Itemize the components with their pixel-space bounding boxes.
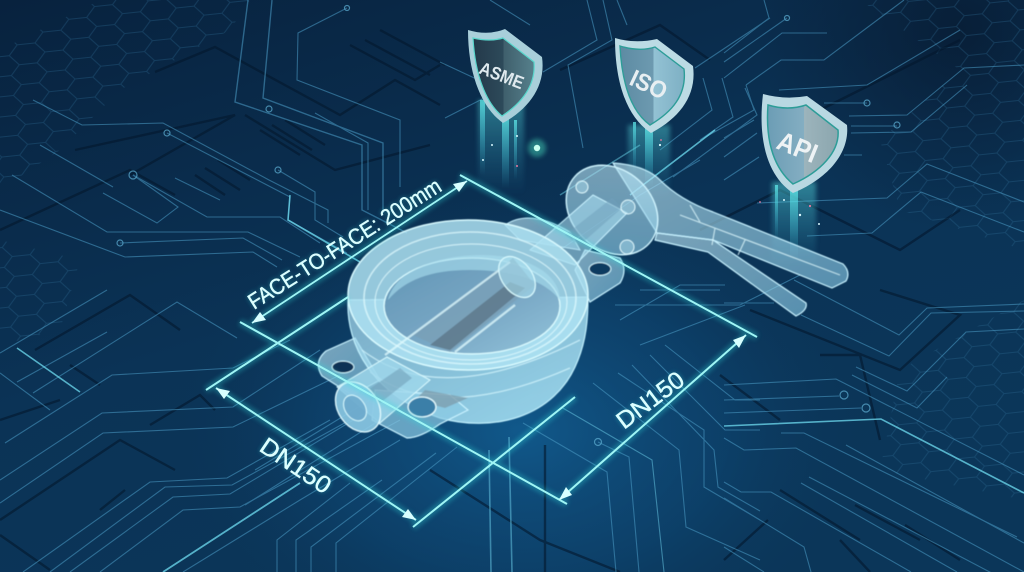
valve shaft <box>413 258 535 352</box>
shield: ASME <box>468 29 543 123</box>
upper extension line <box>460 175 757 337</box>
dimension glow <box>206 175 757 527</box>
body lower bands <box>362 340 580 398</box>
ring inner edges <box>364 232 576 364</box>
shield beams and sparks <box>478 100 820 267</box>
shaft shading <box>430 282 525 350</box>
valve top ring <box>348 220 588 370</box>
handle highlights <box>680 205 840 275</box>
shaft lower tube <box>337 357 430 423</box>
lower extension line <box>240 322 567 504</box>
lever handle lower <box>655 233 806 316</box>
valve: transparent butterfly valve <box>318 147 848 441</box>
valve body wall <box>348 297 588 423</box>
bottom lug hole <box>408 397 436 417</box>
shield: API: API <box>773 126 822 169</box>
shaft end cap <box>326 373 390 441</box>
right mounting lug <box>575 250 624 302</box>
circuit nodes <box>117 6 900 446</box>
valve stem <box>530 195 627 265</box>
label: DN150 right: DN150 <box>611 366 690 435</box>
flange bolts <box>576 181 635 254</box>
upper disc bevel <box>388 255 560 300</box>
bottom corner line <box>413 397 575 527</box>
DN150 right dimension line <box>559 335 746 500</box>
bright circuit traces <box>17 130 1024 572</box>
shaft highlight <box>385 262 515 355</box>
shaft end bore <box>339 391 371 425</box>
label: DN150 left: DN150 <box>255 433 336 500</box>
left lug hole <box>332 361 354 373</box>
stem flange <box>548 147 676 273</box>
shaft top cap <box>491 250 543 304</box>
label: DN150 left: DN150 <box>255 433 336 500</box>
lower tube core <box>365 368 412 403</box>
left cross line <box>206 297 348 390</box>
right lug hole <box>589 262 611 276</box>
shield: ISO: ISO <box>625 65 671 105</box>
label: face to face: FACE-TO-FACE: 200mm <box>243 173 446 314</box>
lever handle upper <box>613 163 848 288</box>
dimension lines <box>206 175 757 527</box>
shield: ISO <box>615 38 694 133</box>
stem inner tube <box>565 198 622 245</box>
top mounting lug <box>505 218 580 250</box>
face-to-face dimension line <box>252 181 467 323</box>
shield: API <box>762 94 847 193</box>
lug gray plate <box>415 390 468 408</box>
shield: ASME: ASME <box>477 58 527 93</box>
left mounting lug <box>318 338 380 395</box>
DN150 left dimension line <box>216 388 416 520</box>
bottom mounting lug <box>372 390 468 438</box>
arrowheads <box>216 181 746 520</box>
label: face to face: FACE-TO-FACE: 200mm <box>243 173 446 314</box>
label: DN150 right: DN150 <box>611 366 690 435</box>
valve disc interior <box>384 258 560 354</box>
